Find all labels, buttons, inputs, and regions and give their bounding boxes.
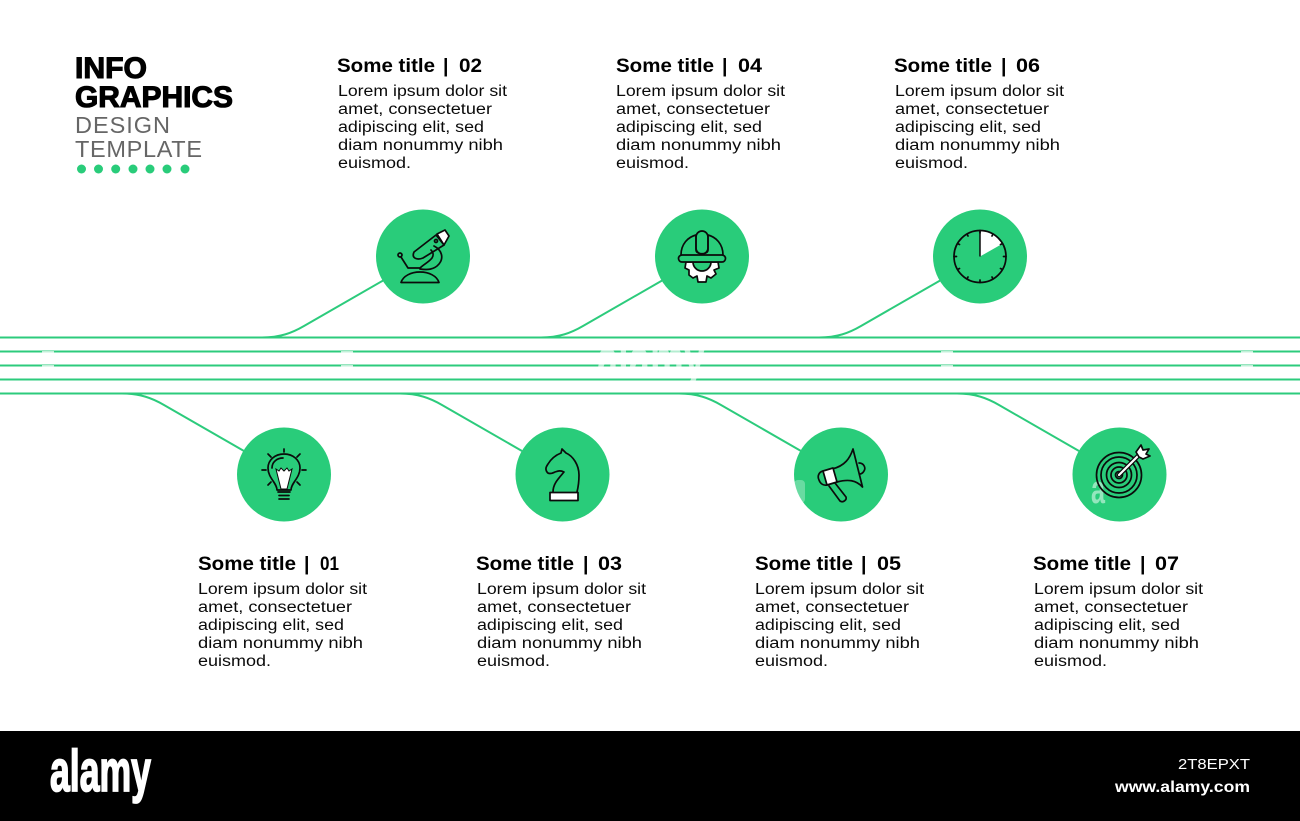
title 02: 02 [459, 55, 482, 77]
footer bar [0, 731, 1300, 821]
text 01: adipiscing elit, sed [198, 617, 344, 634]
website: www.alamy.com [1114, 779, 1250, 796]
text 05 [755, 581, 925, 670]
text 07: diam nonummy nibh [1034, 635, 1199, 652]
title 05: Some title [755, 553, 853, 575]
title 04 [616, 55, 762, 77]
title block: GRAPHICS [75, 81, 233, 114]
title 05: | [861, 553, 866, 575]
text 04: euismod. [616, 155, 689, 172]
step 07: target [1033, 428, 1204, 670]
title 07: 07 [1155, 553, 1179, 575]
text 02: diam nonummy nibh [338, 137, 503, 154]
title 05: 05 [877, 553, 901, 575]
text 03 [477, 581, 647, 670]
text 02: Lorem ipsum dolor sit [338, 83, 508, 100]
title 03 [476, 553, 622, 575]
icon: helmet [655, 210, 749, 304]
text 07: amet, consectetuer [1034, 599, 1188, 616]
text 02: adipiscing elit, sed [338, 119, 484, 136]
text 05: amet, consectetuer [755, 599, 909, 616]
title 02 [337, 55, 482, 77]
watermark on lines: alamy [597, 330, 705, 388]
title 03: Some title [476, 553, 574, 575]
image id: 2T8EPXT [1178, 757, 1250, 773]
title block: INFO [75, 52, 147, 85]
title 04: 04 [738, 55, 762, 77]
text 01: euismod. [198, 653, 271, 670]
title 06: | [1001, 55, 1006, 77]
text 06: euismod. [895, 155, 968, 172]
text 02: euismod. [338, 155, 411, 172]
icon: microscope [376, 210, 470, 304]
title 02: | [443, 55, 448, 77]
step 01: light bulb [198, 428, 368, 670]
text 03: euismod. [477, 653, 550, 670]
text 05: Lorem ipsum dolor sit [755, 581, 925, 598]
step 03: chess knight [476, 428, 647, 670]
text 03: amet, consectetuer [477, 599, 631, 616]
title 04: Some title [616, 55, 714, 77]
alamy logo: alamy [50, 739, 151, 804]
text 01: diam nonummy nibh [198, 635, 363, 652]
text 05: adipiscing elit, sed [755, 617, 901, 634]
title 06: Some title [894, 55, 992, 77]
icon: megaphone [794, 428, 888, 522]
text 04: Lorem ipsum dolor sit [616, 83, 786, 100]
text 04 [616, 83, 786, 172]
title 07 [1033, 553, 1179, 575]
text 04: adipiscing elit, sed [616, 119, 762, 136]
icon: target: a [1091, 468, 1105, 512]
step 04: helmet with gear [616, 55, 786, 304]
title 01 [198, 553, 339, 575]
text 05: euismod. [755, 653, 828, 670]
text 07: euismod. [1034, 653, 1107, 670]
title 01: 01 [320, 553, 339, 575]
step 06: clock [894, 55, 1065, 304]
title 06: 06 [1016, 55, 1040, 77]
title 03: 03 [598, 553, 622, 575]
title 01: Some title [198, 553, 296, 575]
text 04: diam nonummy nibh [616, 137, 781, 154]
text 05: diam nonummy nibh [755, 635, 920, 652]
text 03: adipiscing elit, sed [477, 617, 623, 634]
title block [75, 52, 233, 174]
title block: TEMPLATE [75, 136, 202, 162]
text 06: adipiscing elit, sed [895, 119, 1041, 136]
text 02: amet, consectetuer [338, 101, 492, 118]
icon: target [1072, 428, 1166, 522]
text 04: amet, consectetuer [616, 101, 770, 118]
text 01: amet, consectetuer [198, 599, 352, 616]
text 07: Lorem ipsum dolor sit [1034, 581, 1204, 598]
title block: DESIGN [75, 112, 170, 138]
text 07: adipiscing elit, sed [1034, 617, 1180, 634]
text 03: diam nonummy nibh [477, 635, 642, 652]
step 05: megaphone [755, 428, 925, 670]
title 04: | [722, 55, 727, 77]
text 06 [895, 83, 1065, 172]
title 02: Some title [337, 55, 435, 77]
text 02 [338, 83, 508, 172]
text 06: diam nonummy nibh [895, 137, 1060, 154]
title 06 [894, 55, 1040, 77]
title 07: | [1140, 553, 1145, 575]
title 07: Some title [1033, 553, 1131, 575]
text 06: Lorem ipsum dolor sit [895, 83, 1065, 100]
text 07 [1034, 581, 1204, 670]
step 02: microscope [337, 55, 508, 304]
icon: light bulb [237, 428, 331, 522]
watermark on lines [42, 330, 1253, 388]
text 01: Lorem ipsum dolor sit [198, 581, 368, 598]
title 05 [755, 553, 901, 575]
timeline lines [0, 280, 1300, 451]
title 01: | [304, 553, 309, 575]
text 01 [198, 581, 368, 670]
title 03: | [583, 553, 588, 575]
icon: clock [933, 210, 1027, 304]
icon: chess knight [516, 428, 610, 522]
text 06: amet, consectetuer [895, 101, 1049, 118]
text 03: Lorem ipsum dolor sit [477, 581, 647, 598]
